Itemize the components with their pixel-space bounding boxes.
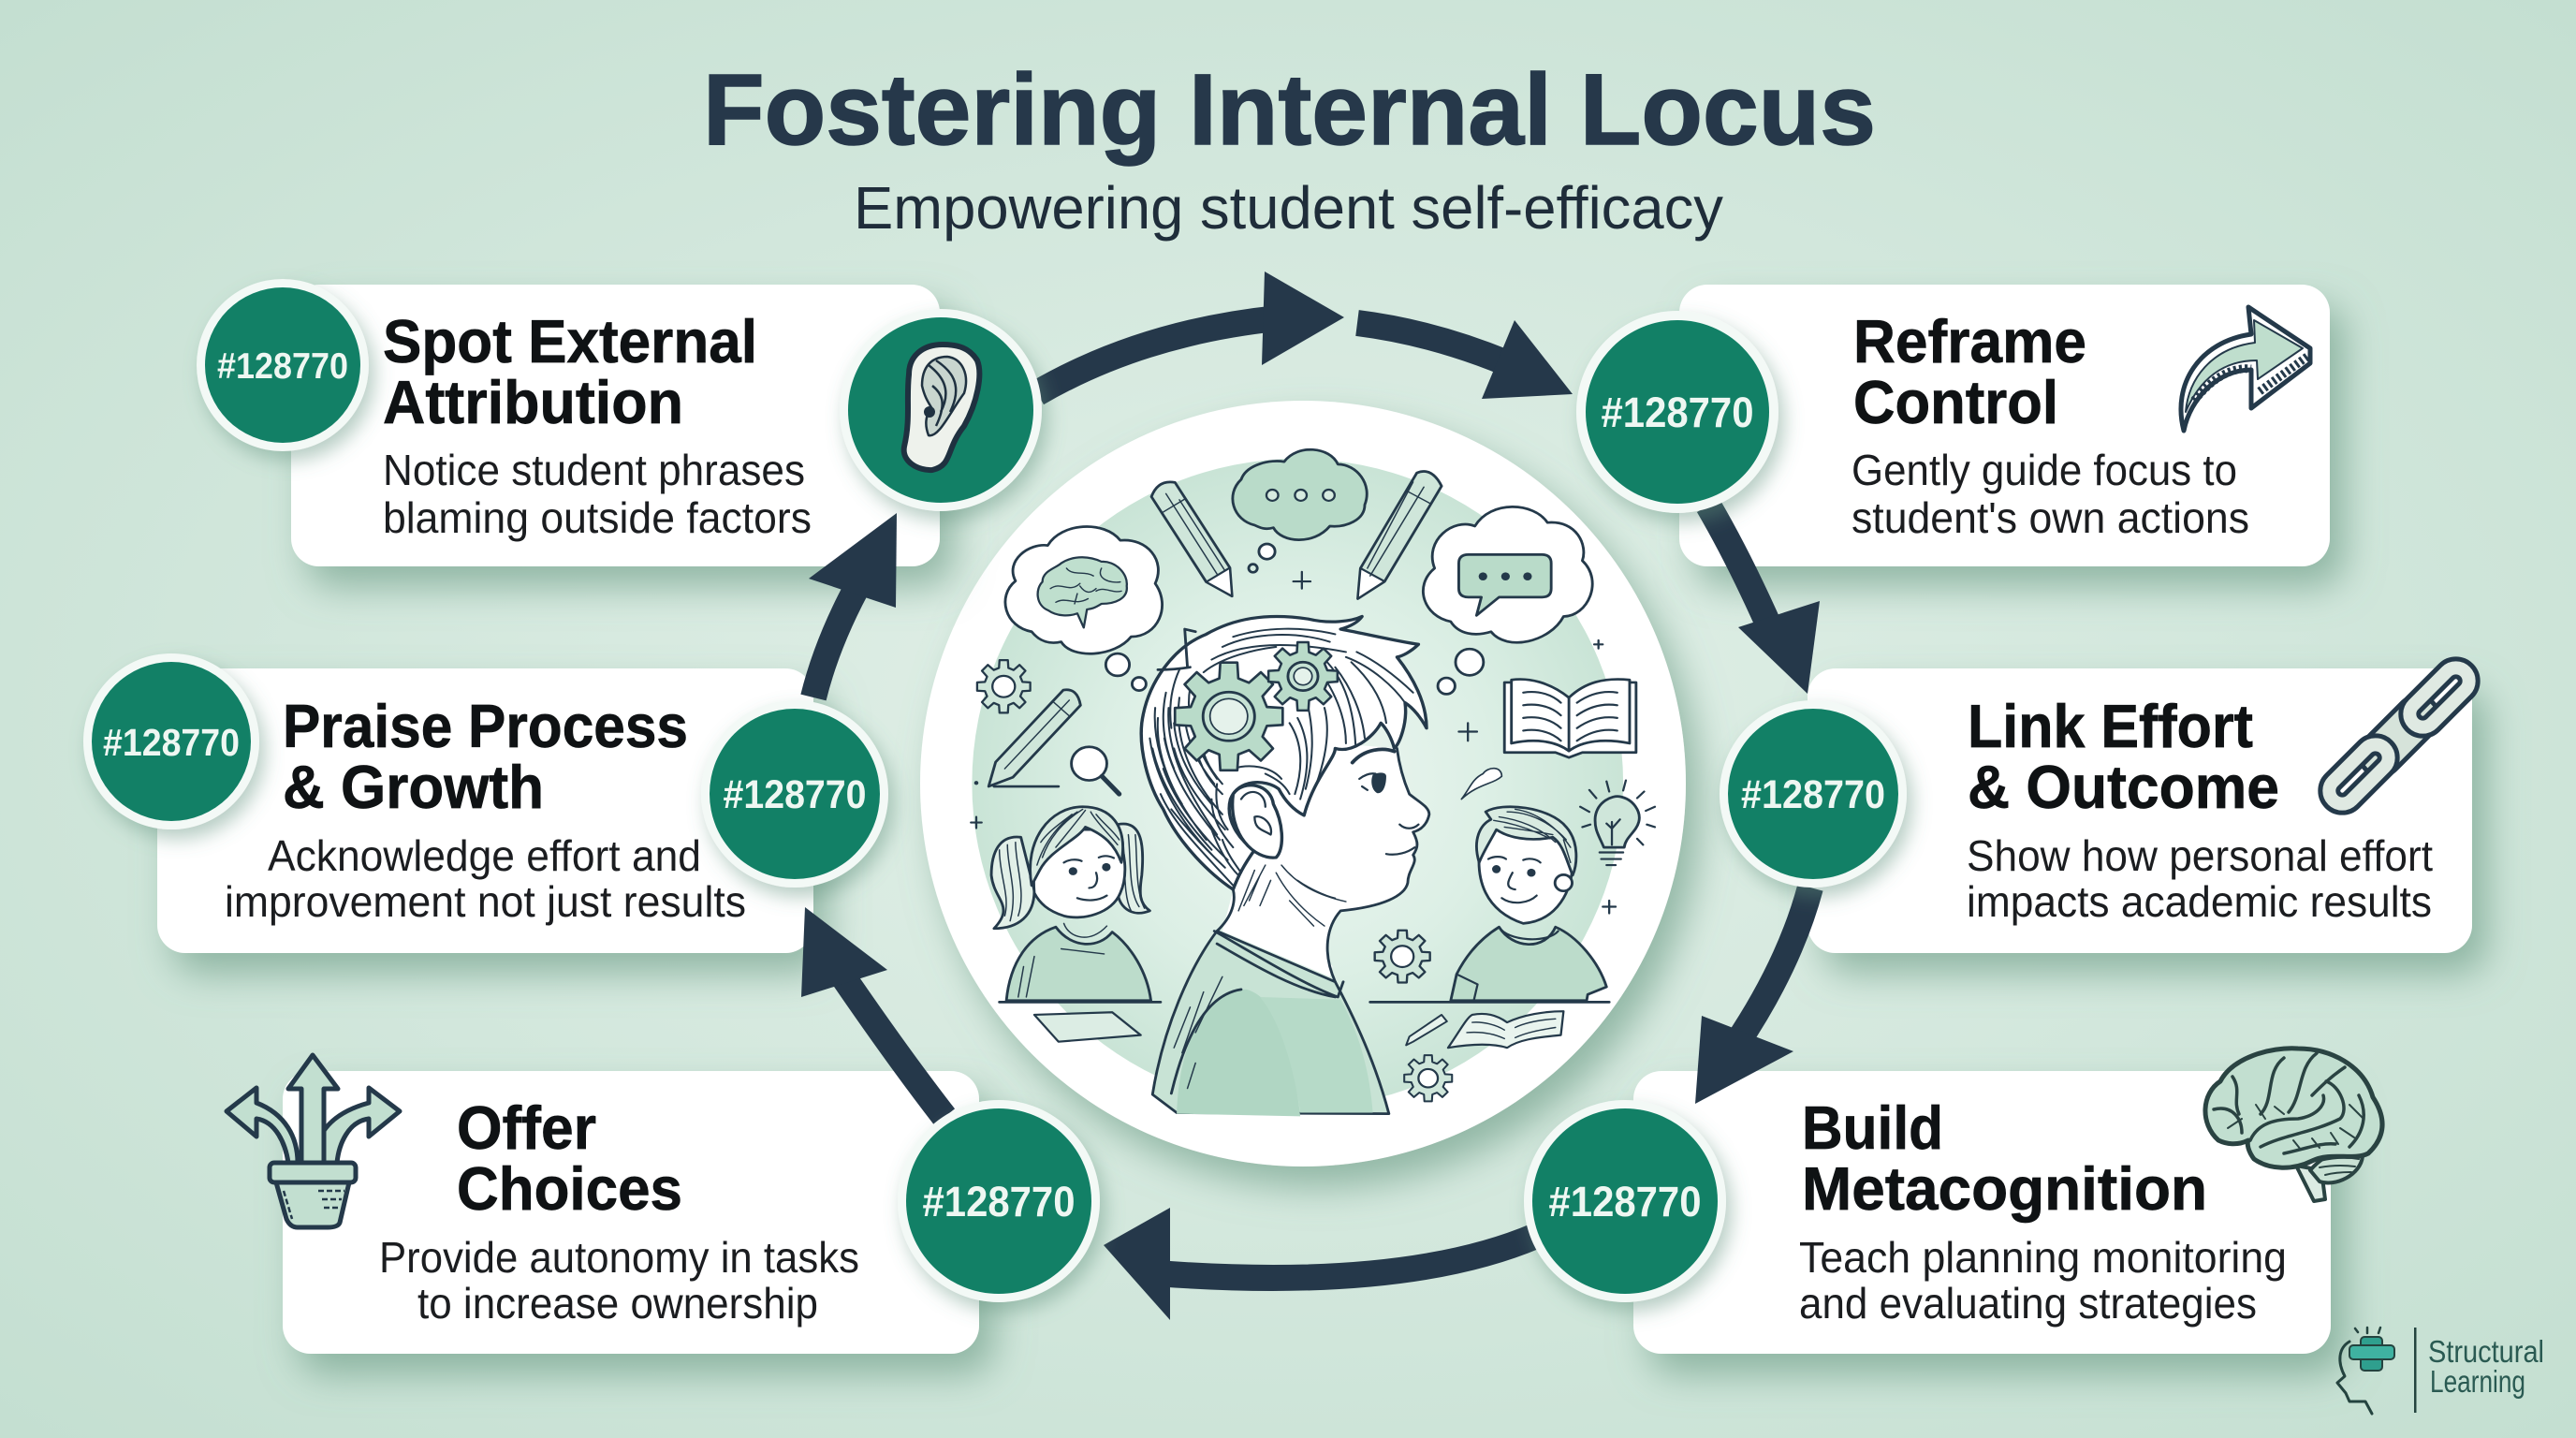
badge: offer hash — [898, 1100, 1100, 1302]
logo text: Structural — [2428, 1334, 2544, 1369]
icon: open book — [1504, 680, 1636, 757]
icon: speech bubble thought cloud — [1423, 506, 1603, 741]
badge: praise right hash: #128770 — [723, 772, 867, 817]
text: praise process and growth: Praise Process — [283, 692, 688, 760]
text: link effort and outcome: impacts academic results — [1967, 877, 2432, 926]
badge: build hash — [1524, 1100, 1726, 1302]
text: spot external attribution: Notice student phrases — [383, 446, 805, 494]
panel: link effort and outcome card — [1808, 668, 2472, 953]
text: build metacognition — [1799, 1093, 2287, 1328]
icon: light bulb — [971, 769, 1655, 914]
text: build metacognition: Metacognition — [1802, 1154, 2207, 1223]
text: build metacognition: and evaluating strategies — [1799, 1279, 2257, 1328]
text: offer choices: Provide autonomy in tasks — [379, 1233, 859, 1282]
text: offer choices: Offer — [457, 1093, 596, 1162]
arrow: spot to top — [1037, 271, 1344, 393]
face and neck — [1222, 743, 1429, 976]
subtitle: Empowering student self-efficacy — [854, 174, 1723, 242]
badge: build hash: #128770 — [1548, 1178, 1702, 1225]
text: praise process and growth: Acknowledge effort and — [268, 831, 701, 880]
badge: praise left hash — [83, 653, 259, 829]
arrow: link to build — [1695, 888, 1810, 1104]
icon: chain links — [2324, 663, 2474, 809]
figure: girl — [991, 807, 1161, 1042]
panel: praise process and growth card — [157, 668, 813, 953]
badge: praise right hash — [701, 700, 888, 888]
panel: reframe control card — [1679, 285, 2330, 566]
arrow: top to reframe — [1357, 320, 1573, 399]
central illustration: student with thoughts — [920, 401, 1686, 1167]
icon: pencils — [974, 472, 1442, 786]
text: offer choices: Choices — [457, 1154, 682, 1223]
icon: ellipsis thought cloud — [1233, 449, 1367, 589]
badge: offer hash: #128770 — [923, 1178, 1075, 1225]
shirt — [1152, 932, 1389, 1114]
text: reframe control: student's own actions — [1852, 493, 2249, 542]
icon: magnifier — [1072, 747, 1120, 794]
arrow: build to offer — [1104, 1208, 1536, 1320]
title: Fostering Internal Locus — [703, 52, 1876, 166]
text: praise process and growth — [225, 692, 746, 926]
badge: spot hash: #128770 — [217, 346, 348, 387]
text: offer choices — [379, 1093, 859, 1328]
text: reframe control: Control — [1853, 368, 2058, 436]
badge: link hash: #128770 — [1741, 772, 1885, 817]
icon: gear left — [977, 660, 1031, 712]
text: praise process and growth: & Growth — [283, 753, 544, 821]
text: link effort and outcome: Link Effort — [1968, 692, 2253, 760]
panel: offer choices card — [283, 1071, 979, 1354]
ear — [1233, 785, 1281, 858]
icon: curved arrow — [2181, 307, 2310, 431]
icon: head with cross — [2337, 1328, 2394, 1414]
arrow: praise to spot — [809, 513, 897, 697]
figure: boy — [1370, 807, 1609, 1048]
text: praise process and growth: improvement not just results — [225, 877, 746, 926]
text: build metacognition: Build — [1802, 1093, 1943, 1162]
logo: structural learning — [2337, 1328, 2544, 1414]
text: build metacognition: Teach planning monitoring — [1799, 1233, 2287, 1282]
badge: reframe hash — [1576, 311, 1778, 513]
hair — [1141, 616, 1427, 889]
text: reframe control: Gently guide focus to — [1852, 446, 2237, 494]
icon: brain thought cloud — [1005, 526, 1163, 691]
badge: link hash — [1720, 700, 1907, 888]
icon: brain — [2205, 1049, 2382, 1201]
text: link effort and outcome: & Outcome — [1968, 753, 2279, 821]
text: offer choices: to increase ownership — [417, 1279, 818, 1328]
text: spot external attribution: Attribution — [383, 368, 683, 436]
text: spot external attribution: blaming outside factors — [383, 493, 812, 542]
badge: spot hash — [197, 279, 369, 451]
icon: gears lower — [1375, 931, 1452, 1101]
badge: ear icon — [840, 309, 1042, 511]
figure: central student — [1141, 616, 1429, 1116]
panel: build metacognition card — [1633, 1071, 2331, 1354]
arrow: reframe to link — [1708, 506, 1820, 694]
text: spot external attribution: Spot External — [383, 307, 757, 375]
icon: arrows in pot — [227, 1055, 400, 1227]
head gears — [1175, 663, 1282, 770]
text: link effort and outcome — [1967, 692, 2433, 926]
logo text: Learning — [2430, 1364, 2525, 1399]
text: reframe control — [1852, 307, 2249, 542]
panel: spot external attribution card — [291, 285, 940, 566]
text: link effort and outcome: Show how personal effort — [1967, 831, 2433, 880]
text: reframe control: Reframe — [1853, 307, 2086, 375]
badge: reframe hash: #128770 — [1601, 389, 1754, 436]
badge: praise left hash: #128770 — [103, 721, 240, 764]
arrow: offer to praise — [801, 907, 944, 1117]
text: spot external attribution — [383, 307, 812, 542]
icon: ear — [904, 345, 979, 470]
